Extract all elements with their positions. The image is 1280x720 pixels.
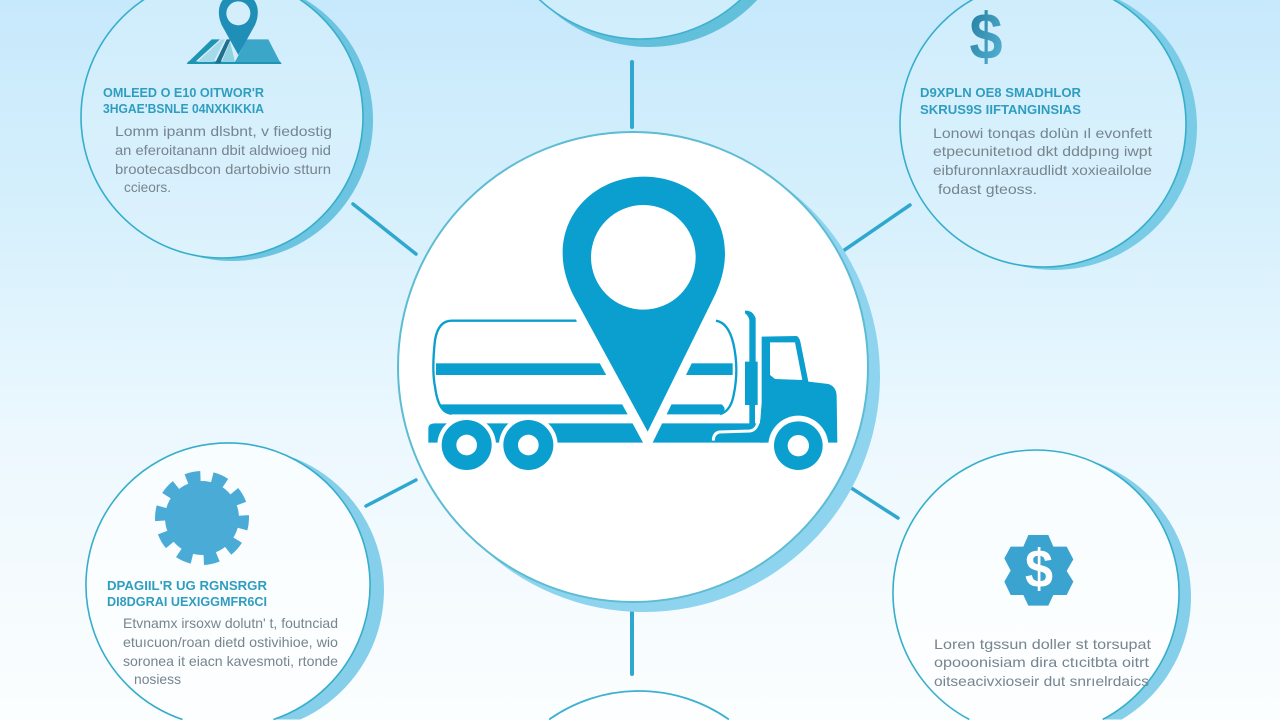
chassis (428, 423, 763, 443)
body text: soronea it eiacn kavesmoti, rtonde (123, 653, 338, 669)
body text: etpecunitetıod dkt dddpıng iwpt (933, 143, 1152, 159)
body text: etuıcuon/roan dietd ostivihioe, wio (123, 634, 338, 650)
body text: ccieors. (124, 179, 171, 195)
heading (103, 85, 265, 116)
body text: nosiess (134, 671, 181, 687)
body text: Lonowi tonqas dolùn ıl evonfett (933, 125, 1152, 141)
body text: an eferoitanann dbit aldwioeg nid (115, 142, 331, 158)
body text: eibfuronnlaxraudlidt xoxieailolɑe (933, 162, 1152, 178)
heading (920, 85, 1082, 117)
body text: opooonisiam dira ctıcitbta oitrt (934, 654, 1149, 670)
connector: top right (843, 205, 910, 251)
icon: dollar gear (1004, 535, 1073, 606)
body text: brootecasdbcon dartobivio stturn (115, 161, 331, 177)
body text: fodast gteoss. (938, 181, 1037, 197)
tank (433, 321, 736, 414)
icon: gear (161, 477, 243, 559)
icon: dollar gear: $ (1025, 539, 1053, 599)
body text: Lomm ipanm dlsbnt, v fiedostig (115, 123, 332, 139)
heading: DPAGIIL'R UG RGNSRGR (107, 578, 268, 593)
panel: central circle (398, 132, 880, 612)
heading: SKRUS9S IIFTANGINSIAS (920, 102, 1081, 117)
heading: D9XPLN OE8 SMADHLOR (920, 85, 1082, 100)
heading (107, 578, 268, 609)
body text (115, 123, 332, 195)
heading: 3HGAE'BSNLE 04NXKIKKIA (103, 101, 265, 116)
icon: tanker truck with location pin (428, 177, 837, 476)
cab (713, 336, 837, 443)
body text (933, 125, 1152, 197)
panel: bottom left (86, 443, 384, 720)
icon: dollar sign: $ (970, 0, 1002, 73)
icon: map with pin (187, 0, 282, 64)
connector: bottom right (845, 484, 898, 518)
heading: DI8DGRAI UEXIGGMFR6CI (107, 594, 267, 609)
connector: top (630, 62, 634, 127)
wheels (437, 416, 828, 476)
location pin (563, 177, 725, 432)
panel: bottom right (893, 450, 1191, 720)
connector: bottom (630, 612, 634, 674)
exhaust pipe (745, 311, 758, 427)
body text: Loren tgssun doller st torsupat (934, 636, 1151, 652)
panel: top left (81, 0, 373, 261)
panel: top right (900, 0, 1197, 270)
panel: bottom partial circle (549, 691, 729, 720)
heading: OMLEED O E10 OITWOR'R (103, 85, 265, 100)
panel: top partial circle (492, 0, 797, 47)
body text: Etvnamx irsoxw dolutn' t, foutnciad (123, 615, 338, 631)
body text (123, 615, 338, 687)
body text (934, 636, 1151, 689)
body text: oitseacivxioseir dut snrıelrdaics (934, 673, 1149, 689)
connector: top left (353, 204, 416, 254)
connector: bottom left (366, 480, 416, 506)
